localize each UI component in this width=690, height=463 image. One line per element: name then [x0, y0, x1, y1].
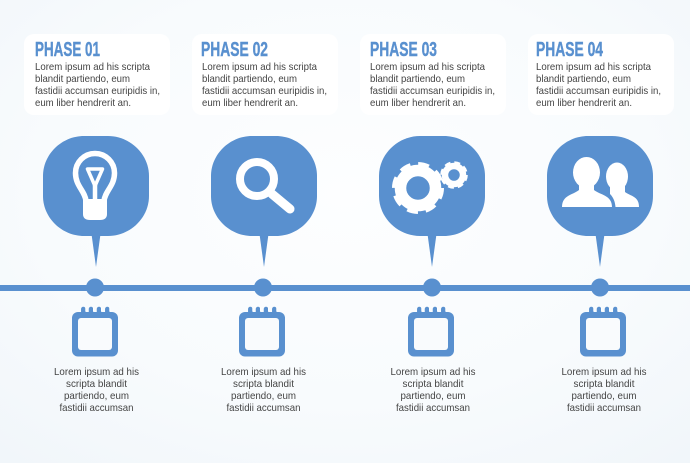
text block: phase 01 description: fastidii accumsan euripidis in,: [35, 85, 160, 97]
text block: caption 3: [390, 366, 476, 414]
text block: phase 02 description: fastidii accumsan euripidis in,: [202, 85, 327, 97]
text block: caption 4: fastidii accumsan: [567, 402, 641, 414]
text block: caption 4: partiendo, eum: [572, 390, 637, 402]
timeline line: [0, 285, 690, 291]
text block: caption 4: scripta blandit: [574, 378, 635, 390]
text block: caption 1: scripta blandit: [66, 378, 127, 390]
icon: calendar 2: [239, 308, 285, 356]
text block: phase 01 description: blandit partiendo, eum: [35, 73, 130, 85]
timeline dot 2: [254, 278, 272, 296]
text block: caption 3: fastidii accumsan: [396, 402, 470, 414]
panel: phase 02 card: [192, 34, 338, 115]
text block: phase 04 description: Lorem ipsum ad his scripta: [536, 61, 651, 73]
text block: phase 03 description: eum liber hendrerit an.: [370, 97, 466, 109]
text block: caption 3: Lorem ipsum ad his: [390, 366, 476, 378]
heading: phase 01: PHASE 01: [35, 39, 100, 61]
heading: phase 04: PHASE 04: [536, 39, 604, 61]
text block: caption 2: Lorem ipsum ad his: [221, 366, 306, 378]
text block: phase 02 description: Lorem ipsum ad his scripta: [202, 61, 317, 73]
text block: caption 1: Lorem ipsum ad his: [54, 366, 139, 378]
text block: phase 04 description: fastidii accumsan euripidis in,: [536, 85, 661, 97]
icon: gears pin: [379, 136, 485, 267]
timeline dot 4: [591, 278, 609, 296]
text block: phase 04 description: [536, 61, 661, 109]
text block: caption 4: [562, 366, 646, 414]
text block: phase 03 description: blandit partiendo, eum: [370, 73, 465, 85]
text block: phase 01 description: Lorem ipsum ad his scripta: [35, 61, 150, 73]
text block: caption 2: partiendo, eum: [231, 390, 296, 402]
text block: phase 01 description: [35, 61, 160, 109]
panel: phase 03 card: [360, 34, 506, 115]
text block: caption 1: partiendo, eum: [64, 390, 129, 402]
text block: caption 1: fastidii accumsan: [60, 402, 134, 414]
icon: calendar 1: [72, 308, 118, 356]
heading: phase 03: PHASE 03: [370, 39, 437, 61]
text block: phase 02 description: blandit partiendo, eum: [202, 73, 297, 85]
text block: caption 2: scripta blandit: [233, 378, 294, 390]
icon: calendar 3: [408, 308, 454, 356]
icon: lightbulb pin: [43, 136, 149, 267]
timeline dot 3: [423, 278, 441, 296]
icon: magnifier pin: [211, 136, 317, 267]
text block: caption 2: fastidii accumsan: [226, 402, 301, 414]
text block: phase 03 description: [370, 61, 495, 109]
text block: caption 3: scripta blandit: [402, 378, 464, 390]
text block: phase 03 description: Lorem ipsum ad his scripta: [370, 61, 485, 73]
panel: phase 04 card: [528, 34, 674, 115]
icon: calendar 4: [580, 308, 626, 356]
text block: caption 4: Lorem ipsum ad his: [562, 366, 646, 378]
text block: caption 1: [54, 366, 139, 414]
text block: phase 04 description: eum liber hendrerit an.: [536, 97, 632, 109]
text block: phase 01 description: eum liber hendrerit an.: [35, 97, 131, 109]
text block: phase 02 description: [202, 61, 327, 109]
text block: phase 02 description: eum liber hendrerit an.: [202, 97, 298, 109]
text block: phase 03 description: fastidii accumsan euripidis in,: [370, 85, 495, 97]
timeline dot 1: [86, 278, 104, 296]
text block: phase 04 description: blandit partiendo, eum: [536, 73, 631, 85]
text block: caption 3: partiendo, eum: [400, 390, 466, 402]
icon: people pin: [547, 136, 653, 267]
panel: phase 01 card: [24, 34, 170, 115]
heading: phase 02: PHASE 02: [201, 39, 268, 61]
text block: caption 2: [221, 366, 306, 414]
